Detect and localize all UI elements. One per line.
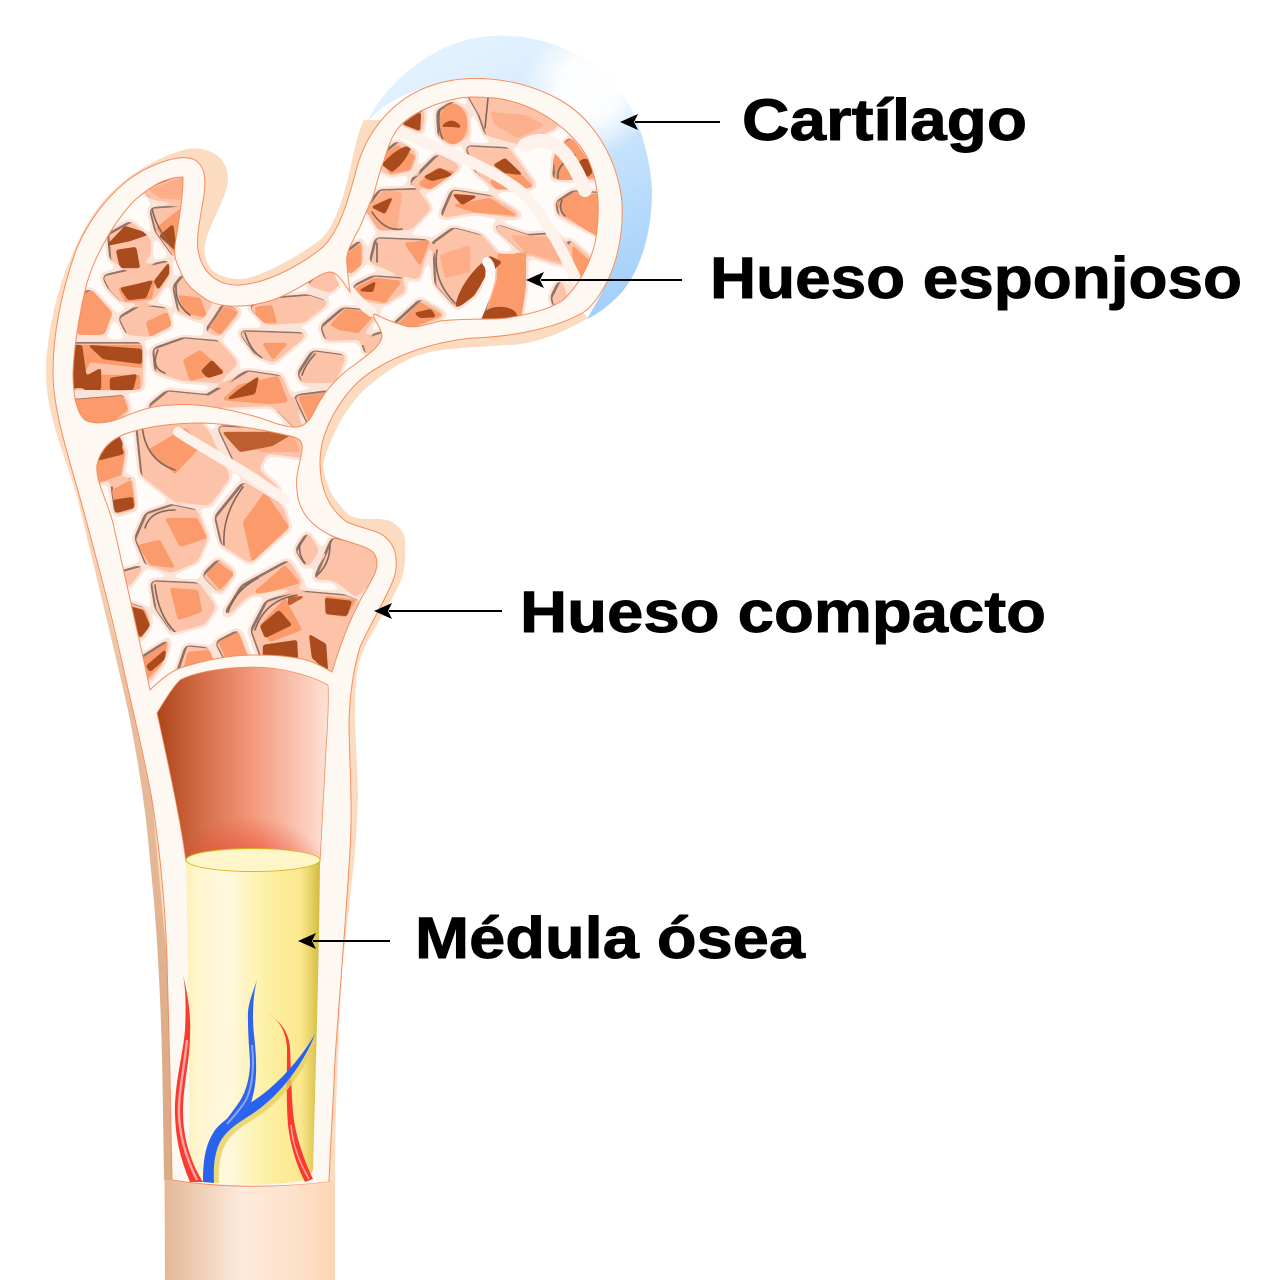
arrow: cartílago bbox=[620, 114, 720, 130]
lower shaft bbox=[165, 1180, 335, 1280]
compact bone bbox=[53, 78, 622, 1186]
blue vein bbox=[203, 980, 316, 1183]
dark pore edge lines bbox=[142, 98, 575, 632]
label: hueso compacto: Hueso compacto bbox=[520, 580, 1046, 645]
label: hueso esponjoso: Hueso esponjoso bbox=[710, 246, 1242, 311]
label: cartílago: Cartílago bbox=[742, 88, 1027, 153]
arrow: hueso compacto bbox=[374, 603, 502, 619]
left artery bbox=[175, 975, 203, 1182]
label: médula ósea: Médula ósea bbox=[415, 906, 806, 971]
medullary cavity bbox=[157, 667, 328, 862]
dark marrow patches bbox=[72, 112, 593, 672]
darker left edge of the shaft bbox=[78, 497, 172, 1180]
arrow: hueso esponjoso bbox=[526, 272, 682, 288]
trabecular halo bbox=[70, 92, 605, 680]
cancellous bone: lower cavity base bbox=[97, 423, 377, 690]
cavity outlines bbox=[73, 97, 598, 690]
bone outer surface bbox=[46, 120, 588, 1280]
arrow: médula ósea bbox=[298, 933, 390, 949]
bone marrow cylinder bbox=[186, 848, 320, 1184]
crossing trabeculae bbox=[178, 128, 585, 500]
trabecular pores with marrow bbox=[70, 92, 611, 685]
cartilage bbox=[367, 36, 652, 319]
trabecular network bbox=[70, 92, 611, 685]
orange marrow patches bbox=[70, 104, 604, 680]
cancellous bone: upper cavity base bbox=[73, 97, 598, 427]
right artery bbox=[265, 1012, 313, 1182]
